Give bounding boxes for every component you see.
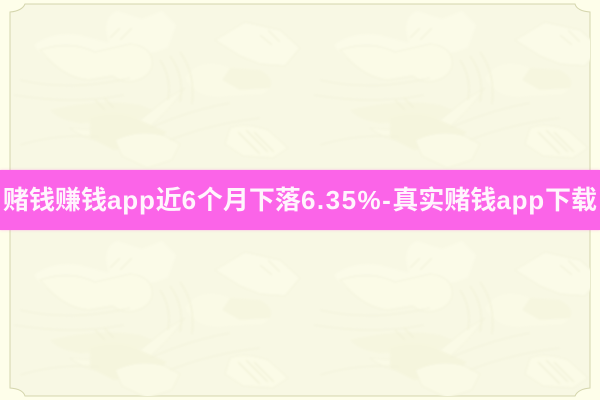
title banner (0, 170, 600, 230)
title: 赌钱赚钱app近6个月下落6.35%-真实赌钱app下载 (3, 185, 597, 215)
ornamental pattern (110, 37, 590, 396)
